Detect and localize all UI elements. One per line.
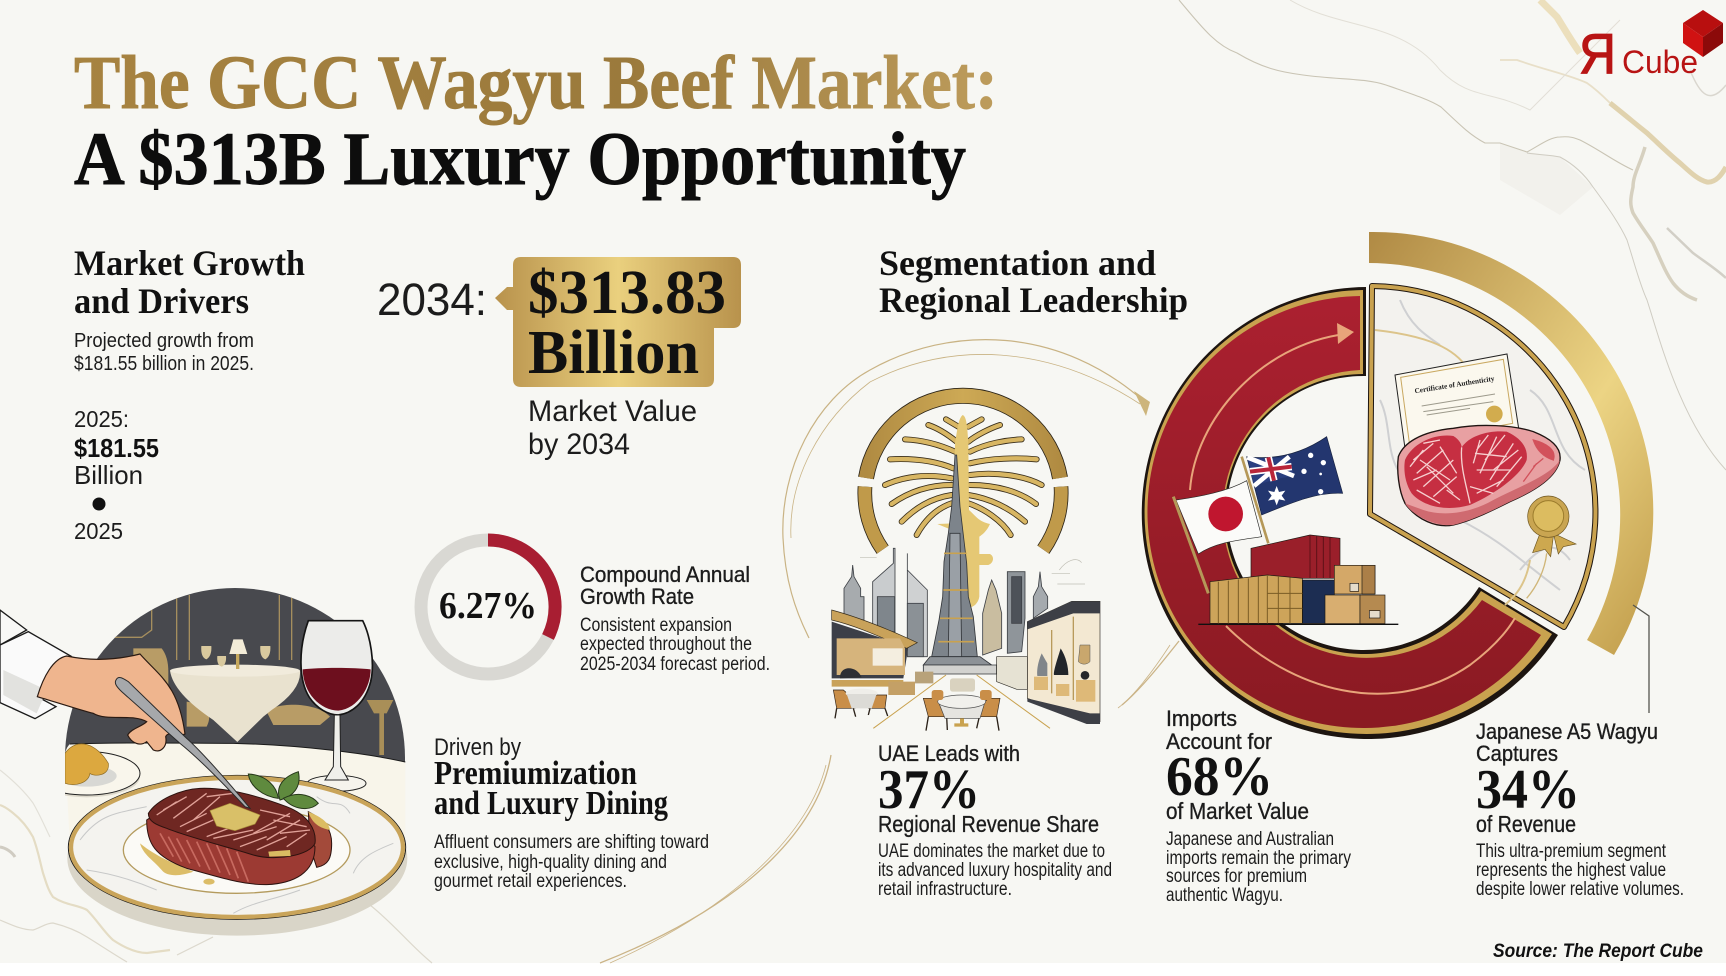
small kiosk xyxy=(997,657,1027,689)
title line 2: A $313B Luxury Opportunity xyxy=(74,118,966,201)
Burj tower xyxy=(923,455,997,674)
Australian flag xyxy=(1242,437,1343,543)
callout caption xyxy=(528,395,697,461)
2025 value xyxy=(74,406,159,490)
chart: CAGR donut xyxy=(421,540,555,674)
gold container xyxy=(1210,575,1302,623)
heading: segmentation and regional leadership xyxy=(879,243,1188,320)
panel: 2034 value callout xyxy=(377,257,741,461)
restaurant pavilion xyxy=(832,610,917,687)
illustration: UAE skyline and palm emblem xyxy=(832,396,1100,731)
timeline label: 2025 xyxy=(74,518,123,544)
palm ring emblem xyxy=(865,396,1061,550)
stat: UAE 37%: UAE Leads with xyxy=(878,741,1020,766)
text: driven by premiumization xyxy=(434,734,709,892)
leader line xyxy=(1633,605,1649,713)
text: compound annual growth rate: Consistent expansion xyxy=(580,615,732,636)
text: driven by premiumization: Premiumization xyxy=(434,755,637,792)
stat: imports 68%: sources for premium xyxy=(1166,866,1307,887)
stat: UAE 37%: retail infrastructure. xyxy=(878,879,1012,900)
stat: imports 68%: Imports xyxy=(1166,706,1237,731)
text: compound annual growth rate: expected throughout the xyxy=(580,634,752,655)
heading: segmentation and regional leadership: Segmentation and xyxy=(879,243,1156,283)
text: driven by premiumization: exclusive, high-quality dining and xyxy=(434,852,667,873)
donut red arc xyxy=(488,540,555,637)
2025 value: 2025: xyxy=(74,406,129,432)
text: compound annual growth rate: 2025-2034 forecast period. xyxy=(580,654,770,675)
callout value: Billion xyxy=(528,319,699,387)
donut value: 6.27% xyxy=(439,585,537,627)
stat: imports 68%: Account for xyxy=(1166,729,1272,754)
heading: market growth and drivers: and Drivers xyxy=(74,281,249,321)
text: driven by premiumization: Driven by xyxy=(434,734,521,761)
callout value xyxy=(528,259,726,387)
skyline towers xyxy=(844,548,1048,657)
chart: imports red ring xyxy=(1142,287,1558,739)
shipping containers xyxy=(1198,535,1398,624)
tweezers xyxy=(115,677,250,808)
dinner plate xyxy=(68,775,406,919)
stat: imports 68%: 68% xyxy=(1166,746,1273,808)
2025 value: $181.55 xyxy=(74,433,159,463)
garnish leaves xyxy=(248,772,318,809)
illustration: flags, containers, steak, certificate xyxy=(1173,354,1576,624)
arrow: lower gold sweep xyxy=(600,641,1179,963)
arrow: curved gold connector to ring xyxy=(783,340,1150,638)
title line 1: The GCC Wagyu Beef Market: xyxy=(74,41,998,125)
stat: UAE 37%: Regional Revenue Share xyxy=(878,811,1099,837)
title xyxy=(74,41,998,201)
wine glass xyxy=(301,621,372,791)
text: driven by premiumization: Affluent consumers are shifting toward xyxy=(434,832,709,853)
stat: Japanese A5 34% xyxy=(1476,719,1684,900)
stat: Japanese A5 34%: represents the highest value xyxy=(1476,860,1666,881)
source line: Source: The Report Cube xyxy=(1493,941,1703,962)
callout caption: by 2034 xyxy=(528,428,630,461)
heading: market growth and drivers xyxy=(74,243,305,321)
restaurant tables xyxy=(833,672,1050,731)
palm trunk xyxy=(937,415,993,607)
steak xyxy=(147,788,332,885)
raw wagyu steak xyxy=(1398,425,1560,526)
hand xyxy=(37,654,185,751)
logo xyxy=(1579,10,1723,86)
ring inner arrow xyxy=(1190,323,1515,694)
stat: imports 68% xyxy=(1166,706,1351,906)
gold callout box xyxy=(495,257,741,387)
logo text: Cube xyxy=(1622,44,1698,80)
stat: imports 68%: authentic Wagyu. xyxy=(1166,885,1283,906)
stat: UAE 37%: its advanced luxury hospitality and xyxy=(878,860,1112,881)
stat: imports 68%: imports remain the primary xyxy=(1166,848,1351,869)
illustration: fine dining steak xyxy=(0,585,410,936)
retail storefront xyxy=(1027,601,1100,724)
callout value: $313.83 xyxy=(528,259,726,327)
text: driven by premiumization: and Luxury Dining xyxy=(434,785,668,822)
chart: outer gold arc for Japanese A5 share xyxy=(1369,232,1653,655)
stat: imports 68%: of Market Value xyxy=(1166,798,1309,824)
text: compound annual growth rate xyxy=(580,562,770,675)
panel: market growth heading and 2025 value xyxy=(74,243,305,544)
stat: Japanese A5 34%: Japanese A5 Wagyu xyxy=(1476,719,1658,744)
gold vein xyxy=(1527,553,1547,598)
stat: Japanese A5 34%: of Revenue xyxy=(1476,811,1576,837)
stat: Japanese A5 34%: This ultra-premium segment xyxy=(1476,841,1667,862)
restaurant backdrop xyxy=(60,585,410,770)
callout caption: Market Value xyxy=(528,395,697,428)
heading: market growth and drivers: Market Growth xyxy=(74,243,305,283)
text: projected growth: Projected growth from xyxy=(74,330,254,352)
stat: Japanese A5 34%: 34% xyxy=(1476,759,1580,821)
plate shadow xyxy=(67,781,407,936)
text: projected growth: $181.55 billion in 2025. xyxy=(74,353,254,375)
gold rosette xyxy=(1528,496,1576,557)
cardboard boxes xyxy=(1334,565,1375,594)
chart: Japanese A5 wedge xyxy=(1370,286,1595,627)
stat: imports 68%: Japanese and Australian xyxy=(1166,829,1334,850)
stat: UAE 37%: 37% xyxy=(878,759,980,821)
blue container xyxy=(1303,580,1334,623)
cuff and sleeve xyxy=(0,610,71,719)
icon: red cube xyxy=(1683,10,1723,57)
bread plate xyxy=(65,744,140,798)
logo text xyxy=(1579,22,1698,86)
marble veins top right xyxy=(1179,0,1726,470)
text: compound annual growth rate: Growth Rate xyxy=(580,584,694,609)
Japanese flag xyxy=(1173,481,1262,593)
text: compound annual growth rate: Compound Annual xyxy=(580,562,750,587)
2025 value: Billion xyxy=(74,460,143,490)
palm fronds xyxy=(885,419,1042,535)
table surface xyxy=(65,743,405,847)
clouds xyxy=(860,557,1085,584)
side lamp xyxy=(367,700,393,755)
text: driven by premiumization: gourmet retail experiences. xyxy=(434,871,627,892)
text: projected growth xyxy=(74,330,254,375)
dining table in background xyxy=(133,639,330,742)
certificate xyxy=(1395,354,1519,448)
stat: UAE 37%: UAE dominates the market due to xyxy=(878,841,1105,862)
label: 2034: 2034: xyxy=(377,274,487,325)
stat: UAE 37% xyxy=(878,741,1112,900)
heading: segmentation and regional leadership: Regional Leadership xyxy=(879,280,1188,320)
logo text: Я xyxy=(1579,22,1616,86)
stat: Japanese A5 34%: Captures xyxy=(1476,741,1558,766)
sauce xyxy=(140,843,215,885)
marble veins bottom left xyxy=(0,770,432,963)
certificate: Certificate of Authenticity xyxy=(1414,374,1495,395)
timeline dot xyxy=(92,498,106,510)
red container xyxy=(1251,535,1340,578)
